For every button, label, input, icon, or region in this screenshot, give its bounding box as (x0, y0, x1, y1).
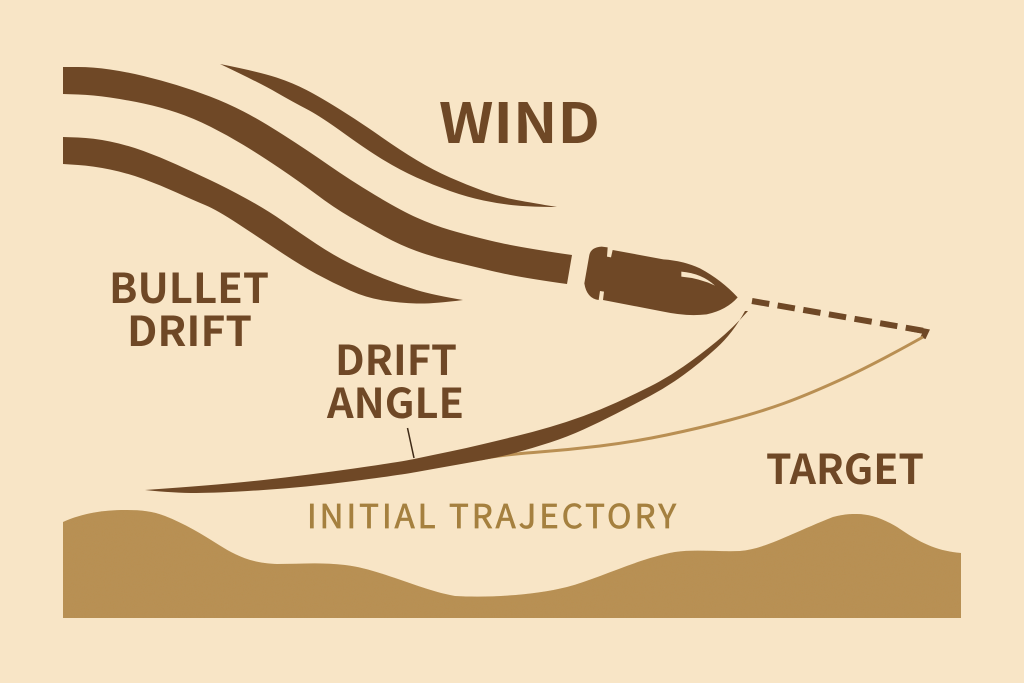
ground terrain (63, 510, 961, 618)
wind streak: main bullet path (63, 67, 572, 284)
label: wind: WIND (439, 79, 600, 159)
wind streak: upper sliver (220, 64, 557, 207)
label: bullet drift (109, 255, 269, 358)
bullet highlight (681, 272, 715, 286)
wind streak: lower (63, 137, 463, 304)
label: target: TARGET (766, 436, 924, 496)
label: bullet drift: BULLET (109, 255, 269, 315)
label: drift angle: DRIFT (335, 327, 457, 387)
label: drift angle (326, 327, 464, 430)
label: drift angle: ANGLE (326, 370, 464, 430)
icon: bullet (584, 247, 738, 315)
drift angle pointer (408, 428, 414, 458)
wind streaks (63, 64, 572, 304)
dashed line to target (752, 301, 925, 331)
label: bullet drift: DRIFT (127, 298, 252, 358)
label: initial trajectory: INITIAL TRAJECTORY (307, 490, 676, 538)
drift angle arc (145, 311, 748, 493)
initial trajectory line (480, 337, 923, 459)
target corner (910, 328, 926, 338)
